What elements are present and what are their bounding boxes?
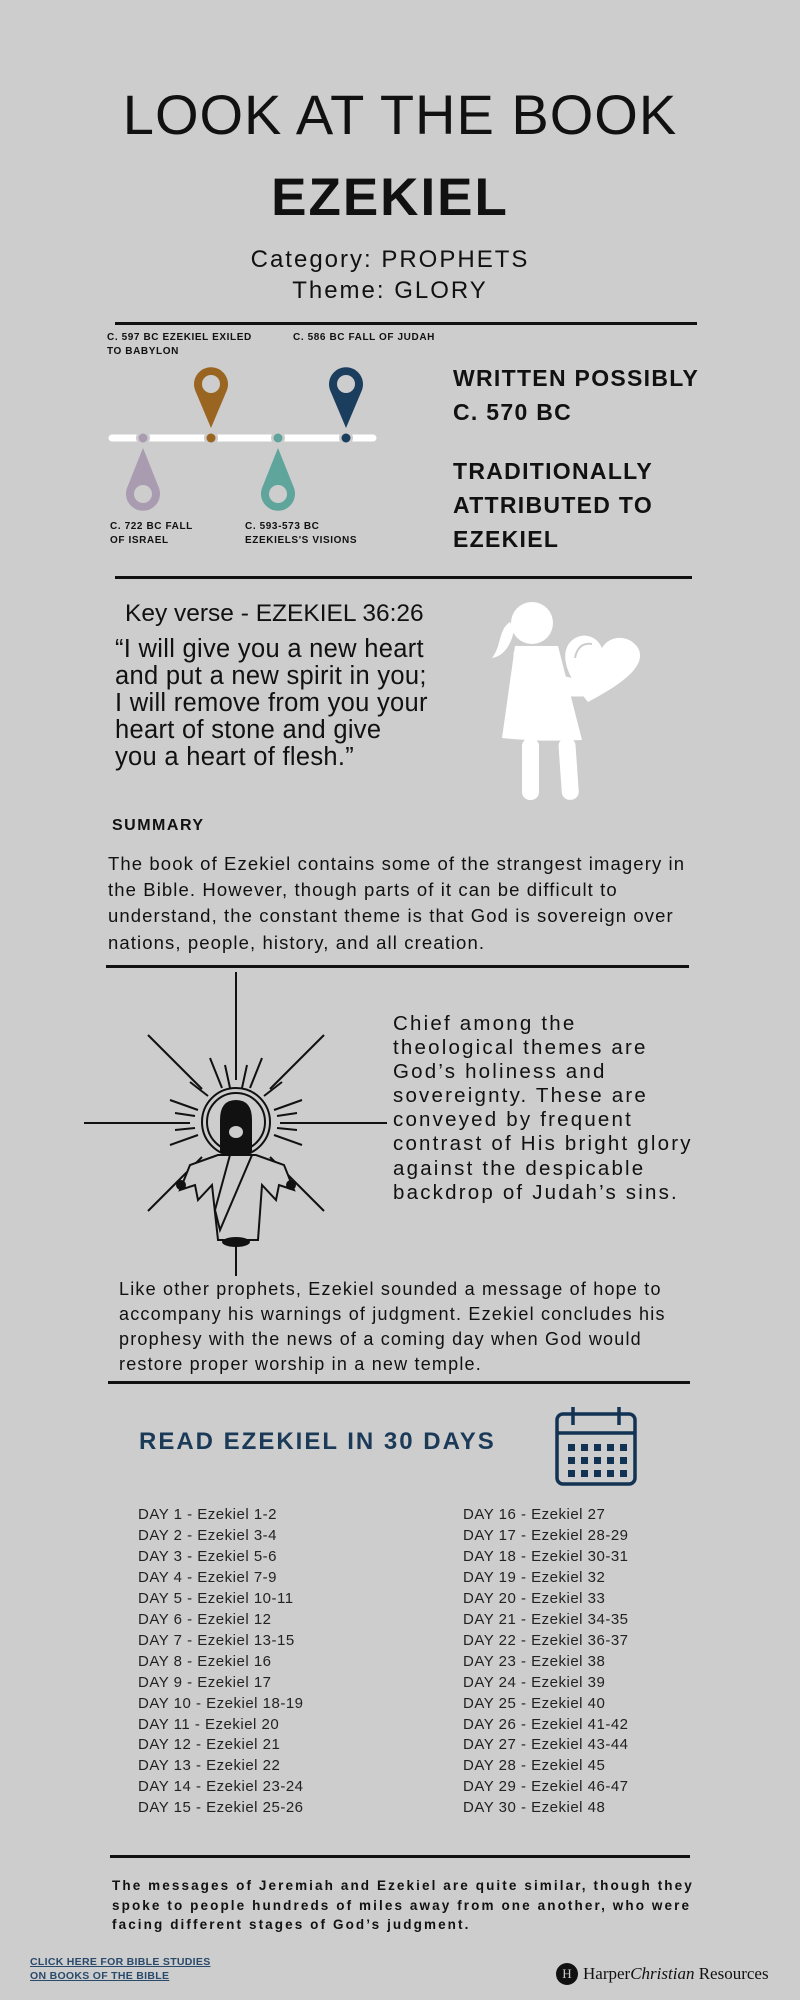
reading list days 16-30: DAY 28 - Ezekiel 45	[463, 1757, 605, 1774]
reading list days 16-30: DAY 25 - Ezekiel 40	[463, 1695, 605, 1712]
summary text: understand, the constant theme is that God is sovereign over	[108, 905, 674, 926]
icon: calendar	[555, 1407, 637, 1486]
theology text	[393, 1012, 693, 1204]
key verse heading: Key verse - EZEKIEL 36:26	[125, 600, 424, 627]
reading list days 16-30: DAY 24 - Ezekiel 39	[463, 1674, 605, 1691]
key verse quote: heart of stone and give	[115, 716, 381, 744]
icon: radiant Jesus	[84, 972, 387, 1276]
theology text: God’s holiness and	[393, 1060, 607, 1083]
reading plan heading: READ EZEKIEL IN 30 DAYS	[139, 1428, 496, 1455]
reading list days 1-15: DAY 7 - Ezekiel 13-15	[138, 1632, 295, 1649]
reading list days 1-15: DAY 1 - Ezekiel 1-2	[138, 1506, 277, 1523]
hope paragraph: Like other prophets, Ezekiel sounded a message of hope to	[119, 1279, 662, 1299]
reading list days 1-15	[138, 1506, 304, 1816]
theology text: Chief among the	[393, 1012, 576, 1035]
summary text	[108, 853, 685, 953]
written date: WRITTEN POSSIBLY	[453, 365, 699, 391]
reading list days 16-30: DAY 29 - Ezekiel 46-47	[463, 1778, 629, 1795]
theology text: backdrop of Judah’s sins.	[393, 1181, 679, 1204]
closing note: The messages of Jeremiah and Ezekiel are quite similar, though they	[112, 1878, 694, 1893]
hope paragraph: accompany his warnings of judgment. Ezekiel concludes his	[119, 1304, 666, 1324]
hope paragraph: prophesy with the news of a coming day when God would	[119, 1329, 642, 1349]
link: bible studies	[30, 1956, 210, 1982]
reading list days 16-30: DAY 19 - Ezekiel 32	[463, 1569, 605, 1586]
book name: EZEKIEL	[271, 168, 509, 227]
theology text: against the despicable	[393, 1157, 645, 1180]
summary text: nations, people, history, and all creation.	[108, 932, 485, 953]
timeline labels bottom: C. 722 BC FALL	[110, 521, 193, 532]
theology text: sovereignty. These are	[393, 1084, 648, 1107]
category and theme: Category: PROPHETS	[251, 246, 529, 273]
timeline labels top: TO BABYLON	[107, 346, 179, 357]
hope paragraph: restore proper worship in a new temple.	[119, 1354, 482, 1374]
timeline chart	[108, 367, 376, 511]
key verse quote: you a heart of flesh.”	[115, 743, 354, 771]
link: bible studies: CLICK HERE FOR BIBLE STUDIES	[30, 1956, 210, 1968]
reading list days 1-15: DAY 5 - Ezekiel 10-11	[138, 1590, 294, 1607]
theology text: conveyed by frequent	[393, 1108, 633, 1131]
attribution: TRADITIONALLY	[453, 458, 653, 484]
reading list days 1-15: DAY 6 - Ezekiel 12	[138, 1611, 272, 1628]
closing note: spoke to people hundreds of miles away from one another, who were	[112, 1898, 691, 1912]
logo: HarperChristian Resources: H	[562, 1966, 572, 1981]
reading list days 16-30: DAY 30 - Ezekiel 48	[463, 1799, 605, 1816]
key verse quote: and put a new spirit in you;	[115, 662, 427, 690]
reading list days 1-15: DAY 2 - Ezekiel 3-4	[138, 1527, 277, 1544]
category and theme: Theme: GLORY	[292, 277, 488, 304]
summary text: The book of Ezekiel contains some of the strangest imagery in	[108, 853, 685, 874]
attribution	[453, 458, 653, 552]
written date: C. 570 BC	[453, 399, 572, 425]
reading list days 1-15: DAY 15 - Ezekiel 25-26	[138, 1799, 304, 1816]
theology text: theological themes are	[393, 1036, 648, 1059]
theology text: contrast of His bright glory	[393, 1132, 693, 1155]
hope paragraph	[119, 1279, 666, 1374]
reading list days 16-30: DAY 16 - Ezekiel 27	[463, 1506, 605, 1523]
reading list days 1-15: DAY 8 - Ezekiel 16	[138, 1653, 272, 1670]
reading list days 1-15: DAY 3 - Ezekiel 5-6	[138, 1548, 277, 1565]
reading list days 16-30: DAY 26 - Ezekiel 41-42	[463, 1716, 629, 1733]
summary text: the Bible. However, though parts of it can be difficult to	[108, 879, 618, 900]
reading list days 1-15: DAY 12 - Ezekiel 21	[138, 1736, 280, 1753]
link: bible studies: ON BOOKS OF THE BIBLE	[30, 1970, 169, 1982]
timeline: C. 593-573 BC	[245, 521, 320, 532]
timeline labels bottom: OF ISRAEL	[110, 535, 169, 546]
reading list days 16-30: DAY 22 - Ezekiel 36-37	[463, 1632, 629, 1649]
reading list days 16-30: DAY 21 - Ezekiel 34-35	[463, 1611, 629, 1628]
attribution: EZEKIEL	[453, 526, 559, 552]
icon: girl holding heart	[492, 602, 640, 800]
timeline labels top: C. 597 BC EZEKIEL EXILED	[107, 332, 252, 343]
attribution: ATTRIBUTED TO	[453, 492, 653, 518]
reading list days 16-30: DAY 18 - Ezekiel 30-31	[463, 1548, 629, 1565]
timeline labels bottom	[110, 521, 193, 546]
key verse quote	[115, 635, 428, 771]
timeline: C. 586 BC FALL OF JUDAH	[293, 332, 435, 343]
reading list days 1-15: DAY 4 - Ezekiel 7-9	[138, 1569, 277, 1586]
timeline: EZEKIELS'S VISIONS	[245, 535, 357, 546]
logo: HarperChristian Resources: HarperChristian Resources	[583, 1964, 769, 1983]
closing note	[112, 1878, 694, 1932]
summary heading: SUMMARY	[112, 817, 205, 834]
reading list days 16-30: DAY 20 - Ezekiel 33	[463, 1590, 605, 1607]
reading list days 1-15: DAY 11 - Ezekiel 20	[138, 1716, 279, 1733]
reading list days 1-15: DAY 14 - Ezekiel 23-24	[138, 1778, 304, 1795]
category and theme	[251, 246, 529, 304]
timeline labels top	[107, 332, 252, 357]
reading list days 16-30	[463, 1506, 629, 1816]
title: LOOK AT THE BOOK	[123, 83, 677, 146]
reading list days 16-30: DAY 17 - Ezekiel 28-29	[463, 1527, 629, 1544]
key verse quote: “I will give you a new heart	[115, 635, 424, 663]
timeline	[107, 332, 435, 546]
written date	[453, 365, 699, 425]
reading list days 1-15: DAY 10 - Ezekiel 18-19	[138, 1695, 304, 1712]
reading list days 1-15: DAY 13 - Ezekiel 22	[138, 1757, 280, 1774]
closing note: facing different stages of God’s judgment.	[112, 1917, 470, 1932]
reading list days 16-30: DAY 23 - Ezekiel 38	[463, 1653, 605, 1670]
reading list days 16-30: DAY 27 - Ezekiel 43-44	[463, 1736, 629, 1753]
key verse quote: I will remove from you your	[115, 689, 428, 717]
reading list days 1-15: DAY 9 - Ezekiel 17	[138, 1674, 272, 1691]
